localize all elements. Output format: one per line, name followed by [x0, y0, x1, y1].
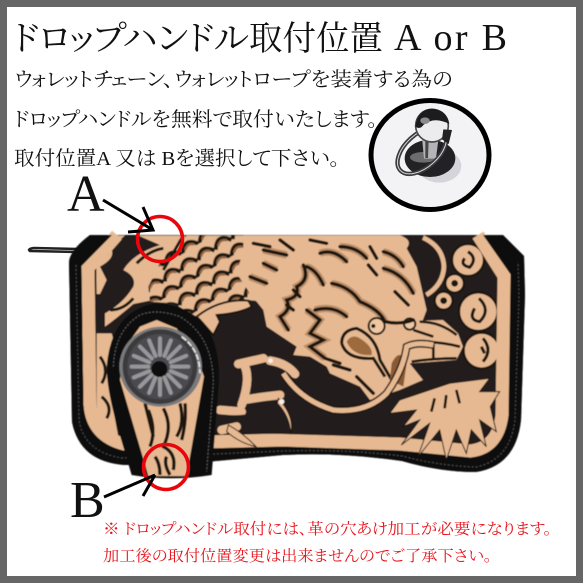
circle frame: [371, 100, 489, 210]
brow and hair strokes: [250, 240, 413, 393]
wallet black rim: [69, 235, 525, 472]
description text: 取付位置A 又は Bを選択して下さい。: [14, 147, 340, 170]
whisker and paw: [220, 344, 433, 412]
marker: circle A: [138, 216, 182, 262]
dragon body and flames: [96, 236, 280, 437]
lower claws: [222, 398, 292, 447]
whisker: [283, 344, 433, 410]
tooled black panel: [95, 235, 497, 444]
wallet photo: [69, 235, 525, 478]
strap with concho: [107, 303, 219, 478]
description text: [14, 68, 453, 170]
left scallops: [96, 236, 125, 294]
beard: [390, 378, 500, 460]
snout and mouth: [342, 328, 392, 380]
head silhouette: [237, 235, 463, 400]
concho dome: [123, 329, 197, 404]
red note: ※ ドロップハンドル取付には、革の穴あけ加工が必要になります。: [103, 519, 552, 538]
whisker outline: [283, 344, 433, 410]
concho scallops: [182, 337, 200, 373]
concho petals: [132, 338, 188, 395]
red note: [103, 519, 552, 565]
strap black outer: [107, 303, 219, 478]
stitching: [76, 262, 519, 467]
crest arc: [423, 238, 444, 295]
arrow B: [104, 475, 155, 497]
dragon head: [237, 235, 463, 400]
concho base: [119, 327, 202, 407]
title: 取付位置: [249, 20, 383, 58]
title: A or B: [394, 17, 507, 59]
left flame: [105, 236, 200, 327]
title: ドロップハンドル: [13, 21, 249, 58]
icon: drop handle hardware in circle: [371, 100, 489, 210]
cloud swirl lines: [463, 252, 488, 362]
hardware photo: [389, 109, 461, 183]
beard and lower paw: [222, 378, 500, 460]
marker: circle B: [144, 444, 188, 490]
strap tan inlay: [120, 320, 204, 476]
tan border band: [88, 235, 504, 451]
strap wood grain: [145, 403, 185, 475]
concho stone: [151, 361, 167, 377]
label A: A: [67, 166, 105, 223]
snout lines: [412, 322, 460, 362]
description text: ウォレットチェーン、ウォレットロープを装着する為の: [14, 68, 453, 91]
red note: 加工後の取付位置変更は出来ませんのでご了承下さい。: [103, 547, 492, 565]
arrow A: [103, 200, 153, 232]
label B: B: [70, 472, 105, 529]
description text: ドロップハンドルを無料で取付いたします。: [14, 108, 378, 131]
strap edge line: [113, 312, 213, 472]
title: [13, 17, 507, 59]
black ground below the head: [140, 362, 497, 444]
wallet ring: [29, 248, 78, 252]
cloud swirls: [435, 244, 500, 369]
eyes: [369, 318, 385, 334]
clouds and beard: [423, 238, 500, 369]
black strip above the lower band: [135, 410, 400, 438]
scaled body: [148, 236, 280, 317]
paw: [220, 358, 295, 412]
wallet outer black leather: [69, 235, 525, 472]
hair shading: [250, 247, 413, 358]
